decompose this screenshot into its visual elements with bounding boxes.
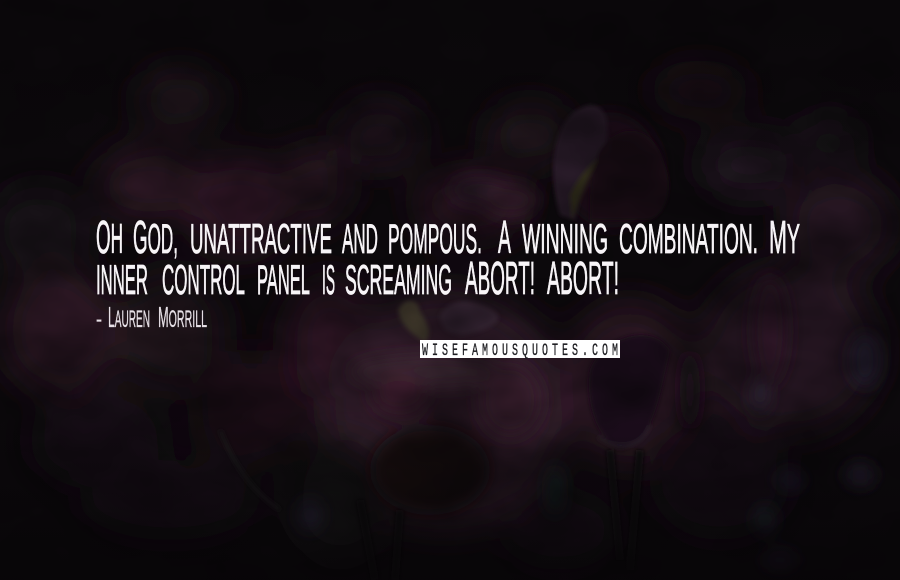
quote line 1 bbox=[96, 211, 800, 263]
quote line 2 bbox=[96, 252, 619, 304]
quote line 1: WINNING bbox=[522, 215, 608, 262]
author attribution: LAUREN bbox=[108, 302, 150, 334]
quote line 2: INNER bbox=[96, 256, 148, 303]
quote line 1: UNATTRACTIVE bbox=[190, 215, 332, 262]
quote line 2: IS bbox=[322, 256, 335, 303]
quote text: ABORT! bbox=[547, 252, 619, 304]
author attribution: - bbox=[96, 306, 102, 333]
quote line 1: POMPOUS. bbox=[388, 215, 482, 262]
background: foreground tulip detail bbox=[220, 105, 670, 580]
quote line 2: PANEL bbox=[257, 256, 310, 303]
quote line 2: CONTROL bbox=[162, 256, 245, 303]
quote line 1: OH bbox=[96, 211, 123, 263]
quote line 2: SCREAMING bbox=[345, 256, 452, 303]
quote text bbox=[96, 211, 800, 304]
watermark logo: WISEFAMOUSQUOTES.COM bbox=[422, 341, 618, 361]
quote line 1: A bbox=[498, 211, 511, 263]
quote line 2: ABORT! bbox=[465, 252, 535, 304]
quote line 1: GOD, bbox=[133, 211, 178, 263]
author attribution: MORRILL bbox=[158, 302, 207, 334]
quote line 1: MY bbox=[769, 211, 800, 263]
quote line 1: AND bbox=[342, 215, 378, 262]
